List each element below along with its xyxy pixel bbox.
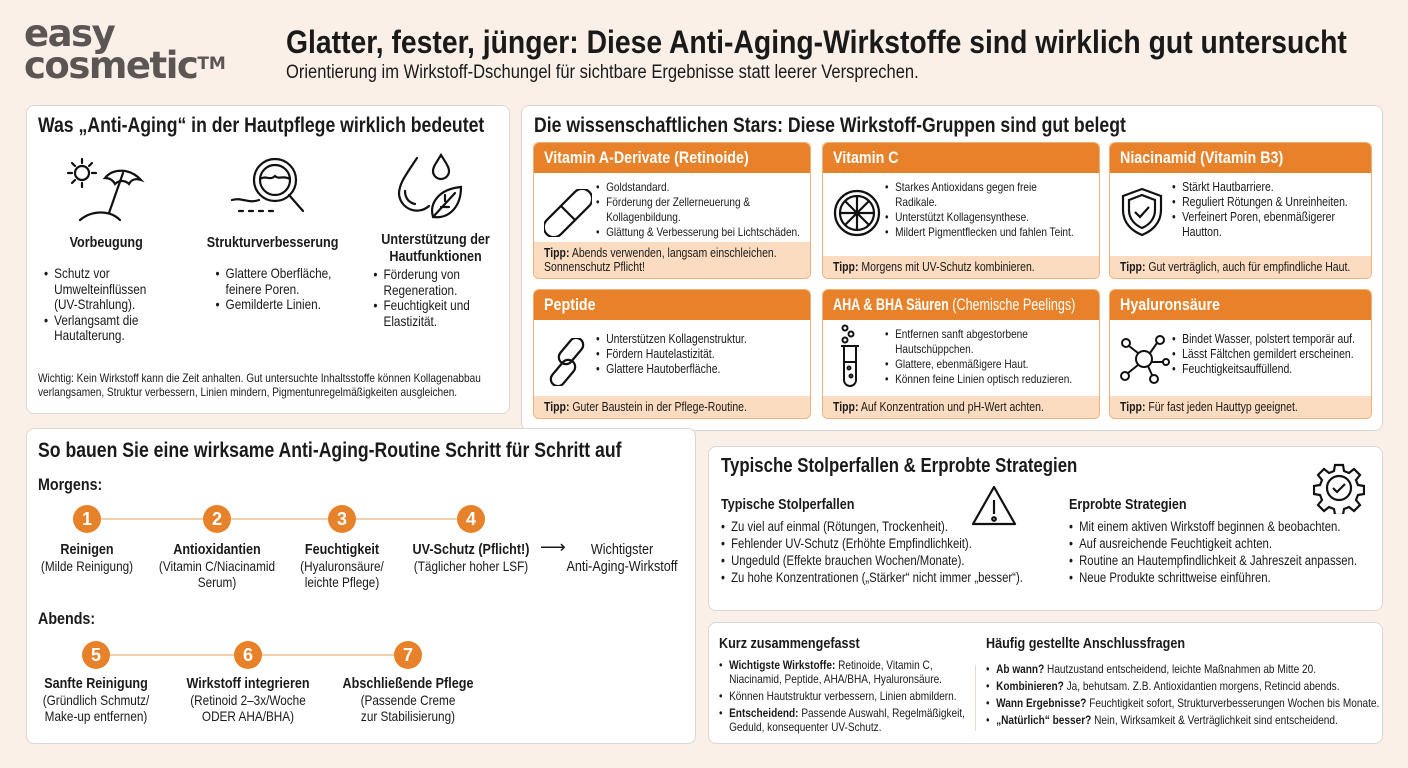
evening timeline: Sanfte Reinigung bbox=[44, 675, 148, 692]
card: AHA BHA bbox=[822, 289, 1100, 419]
column: pitfalls: Ungeduld (Effekte brauchen Wochen/Monate). bbox=[731, 553, 965, 568]
morning timeline: UV-Schutz (Pflicht!) bbox=[413, 541, 529, 558]
column: Vorbeugung: Schutz vor bbox=[54, 265, 110, 281]
morning timeline: 3 bbox=[337, 509, 347, 529]
card: Peptide: Peptide bbox=[544, 295, 596, 314]
morning timeline: Reinigen bbox=[60, 541, 114, 558]
column: strategies: Neue Produkte schrittweise einführen. bbox=[1079, 570, 1271, 585]
card: AHA BHA: Tipp: Auf Konzentration und pH-Wert achten. bbox=[833, 400, 1044, 414]
evening timeline: Abschließende Pflege bbox=[343, 675, 473, 692]
panel: summary & FAQ bbox=[708, 622, 1383, 744]
card: Vitamin C: Radikale. bbox=[895, 195, 937, 209]
column: Hautfunktionen: Förderung von bbox=[383, 266, 460, 282]
column: pitfalls bbox=[721, 496, 1023, 585]
evening timeline: Wirkstoff integrieren bbox=[186, 675, 310, 692]
morning timeline: (Täglicher hoher LSF) bbox=[414, 558, 528, 574]
summary: Wichtigste Wirkstoffe: Retinoide, Vitamin C, Niacinamid, Peptide, AHA/BHA, Hyaluronsäure. bbox=[729, 658, 942, 686]
card: Niacinamid bbox=[1109, 142, 1372, 279]
column: Vorbeugung: (UV-Strahlung). bbox=[54, 296, 135, 312]
morning timeline: 1 bbox=[82, 509, 92, 529]
morning timeline: (Vitamin C/Niacinamid bbox=[159, 558, 275, 574]
icon: gear check bbox=[1313, 464, 1365, 514]
card: Niacinamid: Niacinamid (Vitamin B3) bbox=[1120, 148, 1283, 167]
card: Hyaluronsäure: Tipp: Für fast jeden Hauttyp geeignet. bbox=[1120, 400, 1298, 414]
evening timeline: (Passende Creme bbox=[361, 692, 455, 708]
morning timeline: Wichtigster bbox=[591, 541, 653, 558]
FAQ: Wann Ergebnisse? Feuchtigkeit sofort, Strukturverbesserungen Wochen bis Monate. bbox=[996, 696, 1379, 710]
subtitle: Orientierung im Wirkstoff-Dschungel für sichtbare Ergebnisse statt leerer Versprechen. bbox=[286, 62, 919, 83]
card: AHA BHA: Entfernen sanft abgestorbene bbox=[895, 327, 1028, 341]
column: pitfalls: Typische Stolperfallen bbox=[721, 496, 855, 513]
morning timeline: 2 bbox=[212, 509, 222, 529]
card: Niacinamid: Hautton. bbox=[1182, 225, 1222, 239]
title: Glatter, fester, jünger: Diese Anti-Aging-Wirkstoffe sind wirklich gut untersucht bbox=[286, 24, 1347, 60]
morning timeline: (Milde Reinigung) bbox=[41, 558, 133, 574]
FAQ bbox=[986, 635, 1379, 727]
heading: Typische Stolperfallen & Erprobte Strategien bbox=[721, 455, 1077, 477]
card: Vitamin C: Starkes Antioxidans gegen freie bbox=[895, 180, 1037, 194]
card: Peptide: Tipp: Guter Baustein in der Pflege-Routine. bbox=[544, 400, 747, 414]
column: Vorbeugung bbox=[44, 234, 146, 343]
icon: sun umbrella bbox=[66, 158, 145, 222]
card: Retinoide: Förderung der Zellerneuerung & bbox=[606, 195, 750, 209]
column: strategies: Routine an Hautempfindlichkeit & Jahreszeit anpassen. bbox=[1079, 553, 1357, 568]
column: Hautfunktionen: Feuchtigkeit und bbox=[383, 297, 470, 313]
panel: routine bbox=[26, 428, 696, 744]
card: Peptide: Unterstützen Kollagenstruktur. bbox=[606, 332, 747, 346]
column: Strukturverbesserung: Glattere Oberfläche, bbox=[226, 265, 331, 281]
FAQ: Kombinieren? Ja, behutsam. Z.B. Antioxidantien morgens, Retincid abends. bbox=[996, 679, 1340, 693]
card: Retinoide: Glättung & Verbesserung bei Lichtschäden. bbox=[606, 225, 800, 239]
card: Hyaluronsäure: Hyaluronsäure bbox=[1120, 295, 1220, 314]
card: Hyaluronsäure bbox=[1109, 289, 1372, 419]
column: Strukturverbesserung: feinere Poren. bbox=[226, 280, 299, 296]
morning timeline bbox=[41, 505, 678, 590]
evening timeline: ODER AHA/BHA) bbox=[202, 708, 294, 724]
icon: drops leaf bbox=[398, 153, 462, 218]
morning timeline: ⟶ bbox=[540, 537, 566, 557]
card: Hyaluronsäure: Feuchtigkeitsauffüllend. bbox=[1182, 362, 1292, 376]
evening timeline: Make-up entfernen) bbox=[45, 708, 147, 724]
morning timeline: Feuchtigkeit bbox=[305, 541, 379, 558]
card: Niacinamid: Stärkt Hautbarriere. bbox=[1182, 180, 1274, 194]
morning timeline: 4 bbox=[466, 509, 476, 529]
card: Retinoide: Tipp: Abends verwenden, langsam einschleichen. Sonnenschutz Pflicht! bbox=[544, 246, 777, 274]
card: Hyaluronsäure: Bindet Wasser, polstert temporär auf. bbox=[1182, 332, 1355, 346]
FAQ: „Natürlich“ besser? Nein, Wirksamkeit & Verträglichkeit sind entscheidend. bbox=[996, 713, 1338, 727]
column: Vorbeugung: Verlangsamt die bbox=[54, 312, 138, 328]
morning timeline: Antioxidantien bbox=[173, 541, 261, 558]
column: strategies: Auf ausreichende Feuchtigkeit achten. bbox=[1079, 536, 1272, 551]
card: Retinoide: Kollagenbildung. bbox=[606, 210, 681, 224]
label: Abends: Abends: bbox=[38, 609, 95, 628]
heading: Die wissenschaftlichen Stars: Diese Wirkstoff-Gruppen sind gut belegt bbox=[534, 114, 1126, 137]
icon: warning bbox=[972, 486, 1016, 526]
evening timeline: zur Stabilisierung) bbox=[361, 708, 455, 724]
heading: Was „Anti-Aging“ in der Hautpflege wirklich bedeutet bbox=[38, 114, 484, 137]
icon: magnifier skin bbox=[230, 158, 304, 212]
note: Wichtig: Kein Wirkstoff kann die Zeit anhalten. Gut untersuchte Inhaltsstoffe können Kollagenabbau verlangsamen, Struktur verbessern, Linien mindern, Pigmentunregelmäßigkeiten ausgleichen. bbox=[38, 371, 481, 399]
FAQ: Ab wann? Hautzustand entscheidend, leichte Maßnahmen ab Mitte 20. bbox=[996, 662, 1316, 676]
morning timeline: leichte Pflege) bbox=[305, 574, 379, 590]
card: Peptide bbox=[533, 289, 811, 419]
card: Niacinamid: Reguliert Rötungen & Unreinheiten. bbox=[1182, 195, 1348, 209]
morning timeline: Serum) bbox=[198, 574, 236, 590]
card: AHA BHA: Können feine Linien optisch reduzieren. bbox=[895, 372, 1072, 386]
evening timeline: 7 bbox=[403, 645, 413, 665]
card: Hyaluronsäure: Lässt Fältchen gemildert erscheinen. bbox=[1182, 347, 1354, 361]
card: Niacinamid: Verfeinert Poren, ebenmäßigerer bbox=[1182, 210, 1335, 224]
column: strategies bbox=[1069, 496, 1357, 585]
summary bbox=[719, 635, 965, 734]
morning timeline: Anti-Aging-Wirkstoff bbox=[566, 558, 678, 575]
card: Vitamin C: Vitamin C bbox=[833, 148, 899, 167]
column: Hautfunktionen: Unterstützung der Hautfunktionen bbox=[381, 231, 490, 265]
logo: easy bbox=[24, 12, 114, 55]
evening timeline bbox=[43, 641, 474, 724]
card: Retinoide: Vitamin A-Derivate (Retinoide) bbox=[544, 148, 749, 167]
card: Peptide: Fördern Hautelastizität. bbox=[606, 347, 715, 361]
logo: cosmeticTM bbox=[24, 44, 226, 87]
label: Morgens: Morgens: bbox=[38, 475, 102, 494]
card: AHA BHA: AHA & BHA Säuren (Chemische Peelings) bbox=[833, 295, 1075, 314]
summary: Entscheidend: Passende Auswahl, Regelmäßigkeit, Geduld, konsequenter UV-Schutz. bbox=[729, 706, 965, 734]
summary: Können Hautstruktur verbessern, Linien abmildern. bbox=[729, 689, 957, 703]
column: pitfalls: Zu hohe Konzentrationen („Stärker“ nicht immer „besser“). bbox=[731, 570, 1023, 585]
column: Hautfunktionen: Regeneration. bbox=[383, 282, 457, 298]
evening timeline: (Retinoid 2–3x/Woche bbox=[190, 692, 306, 708]
column: Hautfunktionen: Elastizität. bbox=[383, 312, 437, 328]
morning timeline: (Hyaluronsäure/ bbox=[300, 558, 384, 574]
column: Hautfunktionen bbox=[374, 231, 490, 328]
column: Vorbeugung: Hautalterung. bbox=[54, 327, 125, 343]
FAQ: Häufig gestellte Anschlussfragen bbox=[986, 635, 1185, 652]
card: Vitamin C bbox=[822, 142, 1100, 279]
logo bbox=[24, 12, 226, 87]
column: strategies: Erprobte Strategien bbox=[1069, 496, 1187, 513]
column: strategies: Mit einem aktiven Wirkstoff beginnen & beobachten. bbox=[1079, 519, 1340, 534]
card: Retinoide: Goldstandard. bbox=[606, 180, 669, 194]
column: pitfalls: Fehlender UV-Schutz (Erhöhte Empfindlichkeit). bbox=[731, 536, 972, 551]
evening timeline: 6 bbox=[243, 645, 253, 665]
evening timeline: 5 bbox=[91, 645, 101, 665]
column: Strukturverbesserung: Gemilderte Linien. bbox=[226, 296, 321, 312]
card: AHA BHA: Hautschüppchen. bbox=[895, 342, 974, 356]
card: Vitamin C: Unterstützt Kollagensynthese. bbox=[895, 210, 1029, 224]
card: AHA BHA: Glattere, ebenmäßigere Haut. bbox=[895, 357, 1028, 371]
summary: Kurz zusammengefasst bbox=[719, 635, 860, 652]
panel: scientific stars bbox=[521, 105, 1383, 431]
panel: Anti-Aging meaning bbox=[26, 105, 510, 414]
column: Strukturverbesserung: Strukturverbesserung bbox=[207, 234, 338, 251]
column: Vorbeugung: Vorbeugung bbox=[70, 234, 143, 251]
evening timeline: (Gründlich Schmutz/ bbox=[43, 692, 149, 708]
column: Strukturverbesserung bbox=[207, 234, 338, 312]
card: Peptide: Glattere Hautoberfläche. bbox=[606, 362, 720, 376]
column: pitfalls: Zu viel auf einmal (Rötungen, Trockenheit). bbox=[731, 519, 948, 534]
card: Retinoide bbox=[533, 142, 811, 279]
panel: pitfalls & strategies bbox=[708, 446, 1383, 611]
card: Niacinamid: Tipp: Gut verträglich, auch für empfindliche Haut. bbox=[1120, 260, 1350, 274]
heading: So bauen Sie eine wirksame Anti-Aging-Routine Schritt für Schritt auf bbox=[38, 439, 621, 462]
card: Vitamin C: Mildert Pigmentflecken und fahlen Teint. bbox=[895, 225, 1074, 239]
card: Vitamin C: Tipp: Morgens mit UV-Schutz kombinieren. bbox=[833, 260, 1035, 274]
column: Vorbeugung: Umwelteinflüssen bbox=[54, 280, 146, 296]
